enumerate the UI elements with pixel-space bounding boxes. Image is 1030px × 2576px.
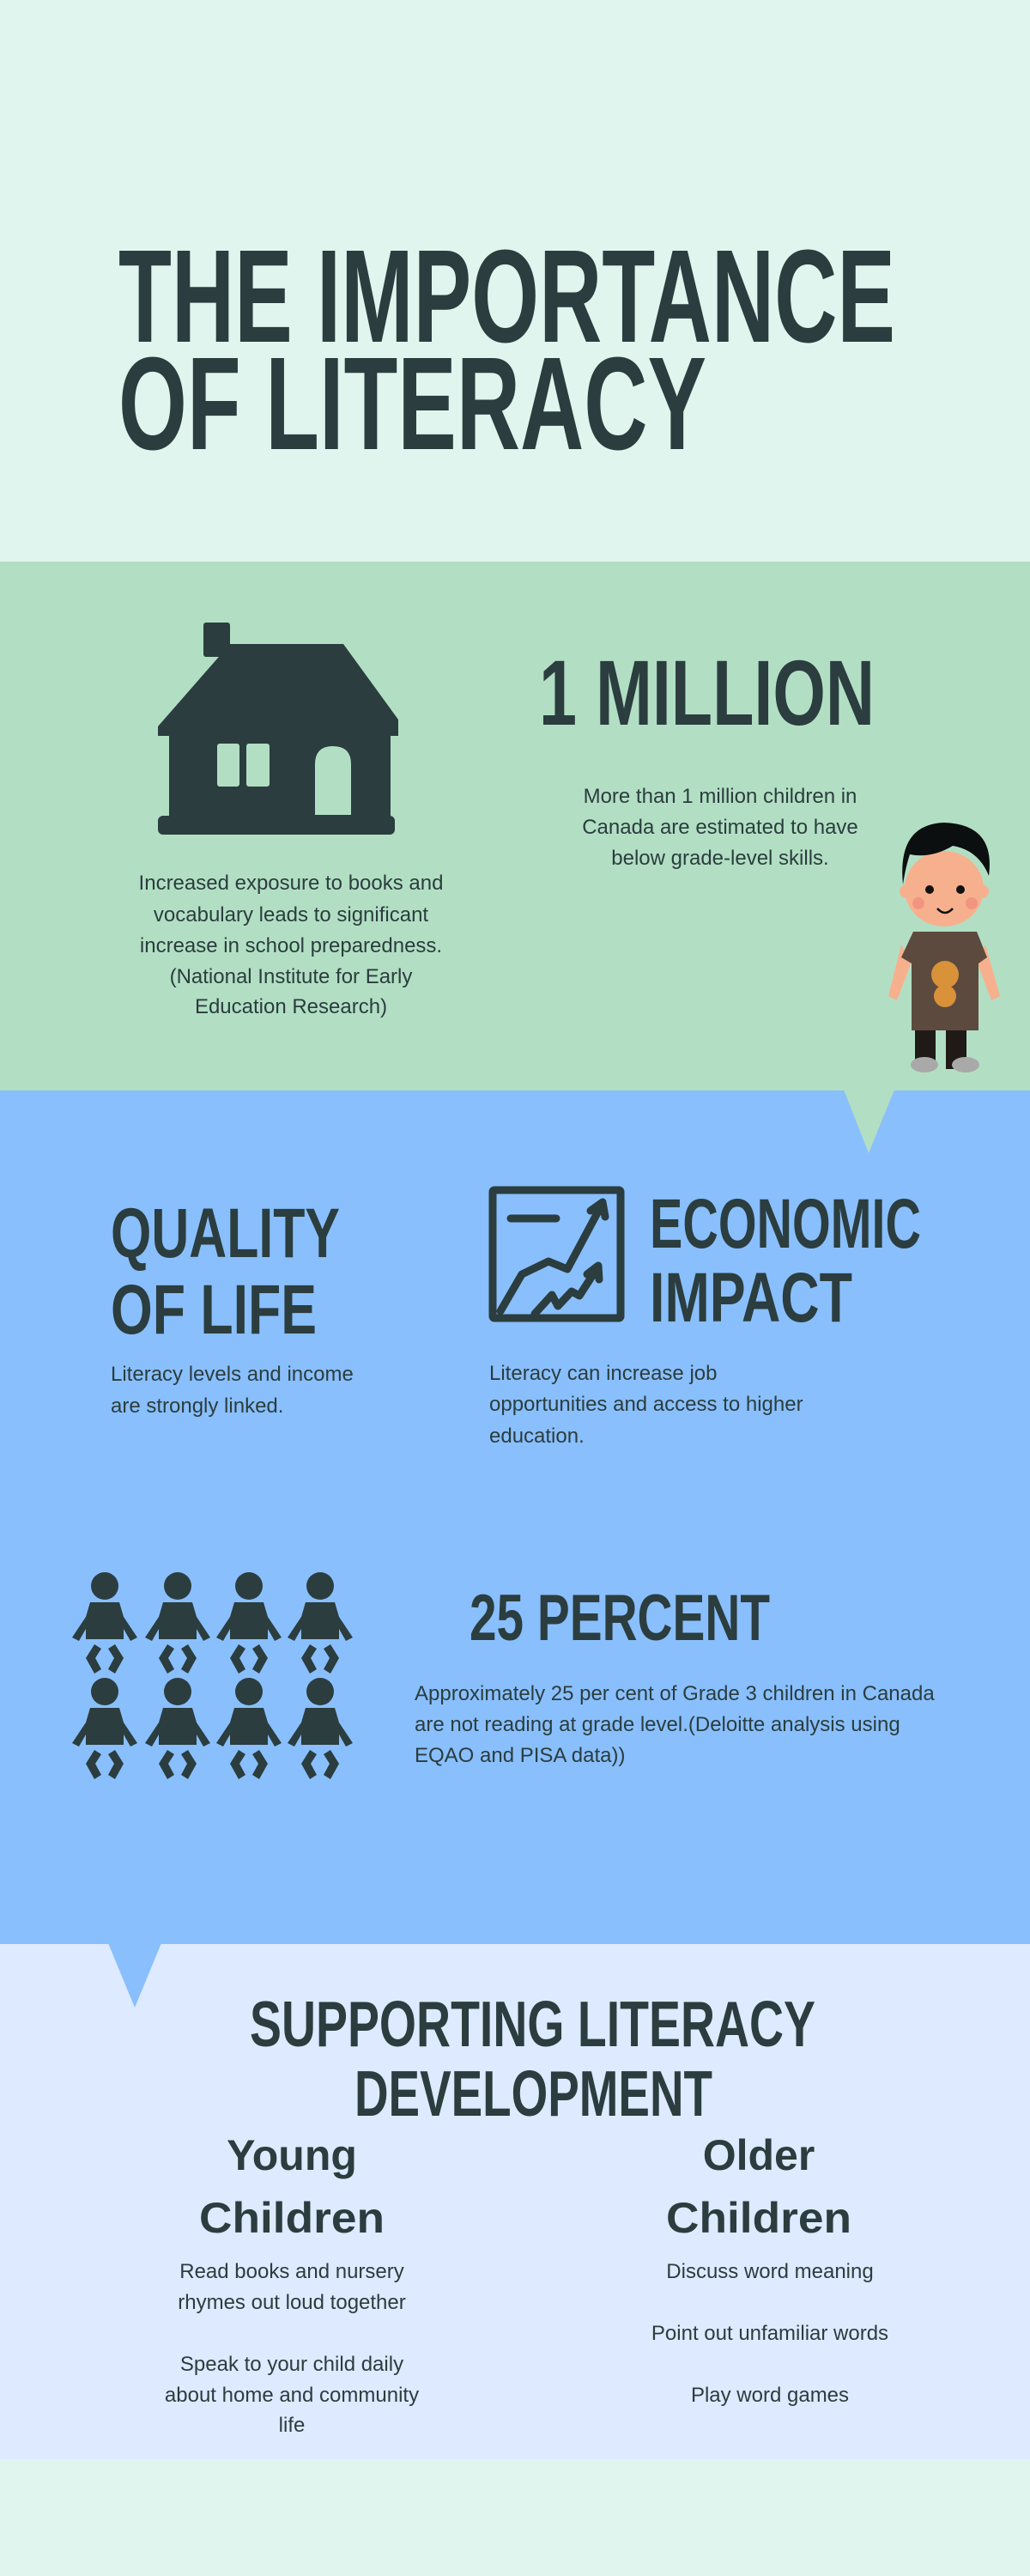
arrow: green pointer	[844, 1090, 894, 1153]
column: older children: Discuss word meaning	[666, 2260, 874, 2283]
heading: quality of life: OF LIFE	[111, 1271, 317, 1349]
text: 1 million description: below grade-level skills.	[611, 847, 829, 870]
icon: house	[158, 623, 398, 835]
column: older children	[651, 2131, 888, 2407]
column: young children: rhymes out loud together	[178, 2291, 406, 2314]
column: older children: Point out unfamiliar words	[651, 2322, 888, 2345]
heading: quality of life: QUALITY	[111, 1194, 340, 1273]
column: young children: Children	[199, 2194, 385, 2242]
heading: economic impact: IMPACT	[650, 1259, 852, 1337]
heading: economic impact: ECONOMIC	[650, 1185, 921, 1263]
text: 25 percent description	[415, 1682, 935, 1767]
text: economic impact: Literacy can increase job	[489, 1362, 717, 1385]
column: older children: Play word games	[691, 2384, 849, 2407]
title	[118, 222, 895, 477]
text: 25 percent description: EQAO and PISA data))	[415, 1744, 625, 1767]
icon: grid of babies	[72, 1572, 353, 1779]
text: school preparedness: (National Institute for Early	[170, 965, 412, 988]
heading: supporting literacy development	[250, 1988, 815, 2129]
arrow: blue pointer	[108, 1943, 161, 2008]
heading: 25 percent: 25 PERCENT	[470, 1582, 770, 1655]
heading: 1 million: 1 MILLION	[539, 641, 875, 744]
text: school preparedness: vocabulary leads to significant	[154, 903, 428, 927]
text: 25 percent description: Approximately 25 per cent of Grade 3 children in Canada	[415, 1682, 935, 1705]
column: young children: Young	[227, 2131, 357, 2179]
column: young children: Speak to your child daily	[180, 2353, 403, 2376]
text: 1 million description: More than 1 million children in	[584, 785, 857, 808]
illustration: boy	[888, 823, 1000, 1072]
text: school preparedness: Increased exposure to books and	[139, 872, 443, 895]
text: school preparedness: increase in school preparedness.	[140, 934, 442, 957]
text: 1 million description	[582, 785, 858, 870]
column: young children	[165, 2131, 419, 2437]
text: quality of life: are strongly linked.	[111, 1394, 283, 1418]
title: OF LITERACY	[118, 330, 706, 477]
column: young children: about home and community	[165, 2384, 419, 2407]
text: 25 percent description: are not reading at grade level.(Deloitte analysis using	[415, 1713, 900, 1736]
text: economic impact	[489, 1362, 803, 1448]
heading: quality of life	[111, 1194, 340, 1349]
text: school preparedness: Education Research)	[195, 995, 387, 1018]
icon: growth chart	[493, 1190, 621, 1318]
text: 1 million description: Canada are estimated to have	[582, 816, 858, 839]
heading: supporting literacy development: SUPPORTING LITERACY	[250, 1988, 815, 2060]
column: young children: Read books and nursery	[179, 2260, 404, 2283]
text: quality of life: Literacy levels and income	[111, 1363, 354, 1386]
text: economic impact: education.	[489, 1425, 585, 1448]
column: young children: life	[279, 2414, 305, 2437]
heading: economic impact	[650, 1185, 921, 1337]
column: older children: Older	[703, 2131, 815, 2179]
column: older children: Children	[666, 2194, 851, 2242]
heading: supporting literacy development: DEVELOPMENT	[354, 2057, 712, 2129]
text: school preparedness	[139, 872, 443, 1018]
text: quality of life	[111, 1363, 354, 1418]
text: economic impact: opportunities and access to higher	[489, 1393, 803, 1416]
